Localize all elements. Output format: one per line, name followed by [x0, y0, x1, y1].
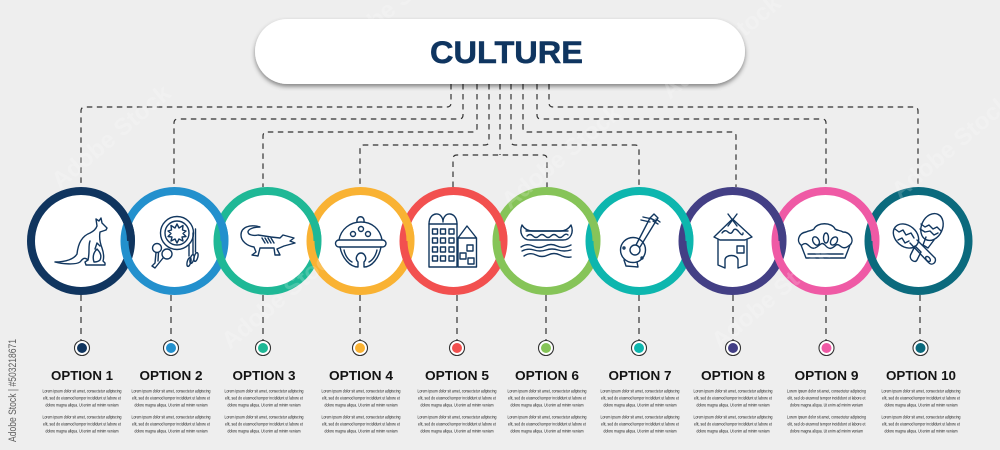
icon: banjo	[620, 214, 660, 267]
icon: crocodile	[241, 226, 295, 256]
body text option 5: dolore magna aliqua. Ut enim ad minim veniam	[420, 402, 494, 408]
icon: jingle bell	[336, 217, 386, 267]
body text option 8: dolore magna aliqua. Ut enim ad minim veniam	[696, 428, 770, 434]
body text option 3	[224, 388, 304, 434]
heading option 2: OPTION 2	[140, 368, 202, 383]
marker dot 4	[352, 340, 368, 356]
body text option 9	[787, 388, 867, 434]
marker dot 3	[256, 340, 270, 356]
body text option 10: Lorem ipsum dolor sit amet, consectetur adipiscing	[882, 414, 961, 420]
heading option 9: OPTION 9	[794, 368, 858, 383]
icon: canoe on water	[521, 225, 572, 257]
body text option 10: dolore magna aliqua. Ut enim ad minim veniam	[884, 428, 958, 434]
marker dot 5	[450, 340, 464, 356]
white circle backgrounds	[31, 191, 968, 291]
body text option 5: dolore magna aliqua. Ut enim ad minim veniam	[420, 428, 494, 434]
heading option 7: OPTION 7	[608, 368, 672, 383]
icon: kangaroo	[55, 218, 107, 265]
body text option 2: elit, sed do eiusmod tempor incididunt ut labore et	[132, 422, 211, 426]
marker dot 7	[632, 340, 646, 356]
body text option 6: elit, sed do eiusmod tempor incididunt ut labore et	[508, 396, 587, 400]
icon: buildings	[429, 214, 476, 267]
heading option 4: OPTION 4	[329, 368, 394, 383]
stock watermark text: Adobe Stock	[707, 239, 837, 355]
body text option 8: Lorem ipsum dolor sit amet, consectetur adipiscing	[694, 414, 773, 420]
body text option 1: Lorem ipsum dolor sit amet, consectetur adipiscing	[42, 414, 122, 420]
title: CULTURE	[430, 34, 583, 70]
body text option 8: Lorem ipsum dolor sit amet, consectetur adipiscing	[694, 388, 773, 394]
icon: hut	[714, 214, 752, 268]
body text option 6: Lorem ipsum dolor sit amet, consectetur adipiscing	[508, 388, 587, 394]
body text option 5: elit, sed do eiusmod tempor incididunt ut labore et	[418, 396, 497, 400]
body text option 6: elit, sed do eiusmod tempor incididunt ut labore et	[508, 422, 587, 426]
heading option 5: OPTION 5	[425, 368, 489, 383]
body text option 9: Lorem ipsum dolor sit amet, consectetur adipiscing	[787, 388, 867, 394]
body text option 7	[600, 388, 680, 434]
body text option 5: elit, sed do eiusmod tempor incididunt ut labore et	[418, 422, 497, 426]
option 9	[787, 340, 867, 434]
option 10	[882, 340, 961, 434]
stock id label: Adobe Stock | #503218671	[7, 339, 19, 442]
heading option 8: OPTION 8	[701, 368, 765, 383]
body text option 9: elit, sed do eiusmod tempor incididunt ut labore et	[788, 396, 866, 400]
body text option 2: dolore magna aliqua. Ut enim ad minim veniam	[134, 402, 208, 408]
option 5	[418, 340, 497, 434]
body text option 7: Lorem ipsum dolor sit amet, consectetur adipiscing	[600, 388, 680, 394]
body text option 10: elit, sed do eiusmod tempor incididunt ut labore et	[882, 422, 961, 426]
body text option 3: dolore magna aliqua. Ut enim ad minim veniam	[228, 402, 301, 408]
stock watermark text: Adobe Stock	[497, 99, 627, 215]
body text option 2: dolore magna aliqua. Ut enim ad minim veniam	[134, 428, 208, 434]
body text option 2: Lorem ipsum dolor sit amet, consectetur adipiscing	[132, 388, 211, 394]
body text option 5: Lorem ipsum dolor sit amet, consectetur adipiscing	[418, 388, 497, 394]
marker dot 2	[164, 340, 178, 356]
body text option 3: elit, sed do eiusmod tempor incididunt ut labore et	[225, 422, 304, 426]
body text option 1: elit, sed do eiusmod tempor incididunt ut labore et	[43, 396, 122, 400]
option 1	[42, 340, 122, 434]
body text option 10: elit, sed do eiusmod tempor incididunt ut labore et	[882, 396, 961, 400]
option 6	[508, 340, 587, 434]
body text option 8: elit, sed do eiusmod tempor incididunt ut labore et	[694, 422, 773, 426]
body text option 4: elit, sed do eiusmod tempor incididunt ut labore et	[322, 396, 401, 400]
body text option 9: elit, sed do eiusmod tempor incididunt ut labore et	[788, 422, 866, 426]
body text option 2	[132, 388, 211, 434]
body text option 3: elit, sed do eiusmod tempor incididunt ut labore et	[225, 396, 304, 400]
body text option 4: Lorem ipsum dolor sit amet, consectetur adipiscing	[322, 388, 401, 394]
body text option 10: dolore magna aliqua. Ut enim ad minim veniam	[884, 402, 958, 408]
body text option 5	[418, 388, 497, 434]
icon: maracas	[889, 210, 947, 264]
option 2	[132, 340, 211, 434]
body text option 10	[882, 388, 961, 434]
option 3	[224, 340, 304, 434]
body text option 6: dolore magna aliqua. Ut enim ad minim veniam	[510, 402, 584, 408]
option 7	[600, 340, 680, 434]
marker dot 6	[538, 340, 554, 356]
upper dashed connectors	[81, 84, 918, 187]
lower dashed connectors	[81, 295, 920, 340]
body text option 7: elit, sed do eiusmod tempor incididunt ut labore et	[601, 396, 680, 400]
marker dot 9	[819, 340, 834, 356]
icon: dreamcatcher and ladles	[152, 216, 199, 268]
body text option 7: dolore magna aliqua. Ut enim ad minim veniam	[604, 428, 677, 434]
marker dot 10	[913, 340, 928, 356]
heading option 6: OPTION 6	[515, 368, 579, 383]
stock watermark text: Adobe Stock	[217, 239, 347, 355]
body text option 4: dolore magna aliqua. Ut enim ad minim veniam	[324, 428, 398, 434]
marker dot 1	[74, 340, 90, 356]
body text option 8: elit, sed do eiusmod tempor incididunt ut labore et	[694, 396, 773, 400]
body text option 4: elit, sed do eiusmod tempor incididunt ut labore et	[322, 422, 401, 426]
icon: pie	[799, 224, 852, 258]
body text option 4	[322, 388, 401, 434]
body text option 6: Lorem ipsum dolor sit amet, consectetur adipiscing	[508, 414, 587, 420]
body text option 8	[694, 388, 773, 434]
body text option 2: elit, sed do eiusmod tempor incididunt ut labore et	[132, 396, 211, 400]
option 8	[694, 340, 773, 434]
body text option 4: Lorem ipsum dolor sit amet, consectetur adipiscing	[322, 414, 401, 420]
title pill	[255, 19, 745, 84]
body text option 3: dolore magna aliqua. Ut enim ad minim veniam	[228, 428, 301, 434]
body text option 8: dolore magna aliqua. Ut enim ad minim veniam	[696, 402, 770, 408]
heading option 3: OPTION 3	[232, 368, 296, 383]
body text option 1: dolore magna aliqua. Ut enim ad minim veniam	[46, 428, 119, 434]
option 4	[322, 340, 401, 434]
heading option 10: OPTION 10	[886, 368, 956, 383]
body text option 7: Lorem ipsum dolor sit amet, consectetur adipiscing	[600, 414, 680, 420]
stock watermark text	[47, 0, 1000, 355]
marker dot 8	[726, 340, 740, 356]
body text option 10: Lorem ipsum dolor sit amet, consectetur adipiscing	[882, 388, 961, 394]
body text option 1: elit, sed do eiusmod tempor incididunt ut labore et	[43, 422, 122, 426]
body text option 3: Lorem ipsum dolor sit amet, consectetur adipiscing	[224, 388, 304, 394]
body text option 5: Lorem ipsum dolor sit amet, consectetur adipiscing	[418, 414, 497, 420]
body text option 2: Lorem ipsum dolor sit amet, consectetur adipiscing	[132, 414, 211, 420]
body text option 7: dolore magna aliqua. Ut enim ad minim veniam	[604, 402, 677, 408]
interlocking coloured rings	[31, 191, 968, 291]
body text option 1: dolore magna aliqua. Ut enim ad minim veniam	[46, 402, 119, 408]
body text option 6: dolore magna aliqua. Ut enim ad minim veniam	[510, 428, 584, 434]
body text option 9: dolore magna aliqua. Ut enim ad minim veniam	[790, 428, 863, 434]
body text option 1: Lorem ipsum dolor sit amet, consectetur adipiscing	[42, 388, 122, 394]
body text option 9: dolore magna aliqua. Ut enim ad minim veniam	[790, 402, 863, 408]
body text option 6	[508, 388, 587, 434]
body text option 3: Lorem ipsum dolor sit amet, consectetur adipiscing	[224, 414, 304, 420]
body text option 7: elit, sed do eiusmod tempor incididunt ut labore et	[601, 422, 680, 426]
stock watermark text: Adobe Stock	[47, 79, 177, 195]
body text option 9: Lorem ipsum dolor sit amet, consectetur adipiscing	[787, 414, 867, 420]
body text option 4: dolore magna aliqua. Ut enim ad minim veniam	[324, 402, 398, 408]
body text option 1	[42, 388, 122, 434]
heading option 1: OPTION 1	[51, 368, 113, 383]
